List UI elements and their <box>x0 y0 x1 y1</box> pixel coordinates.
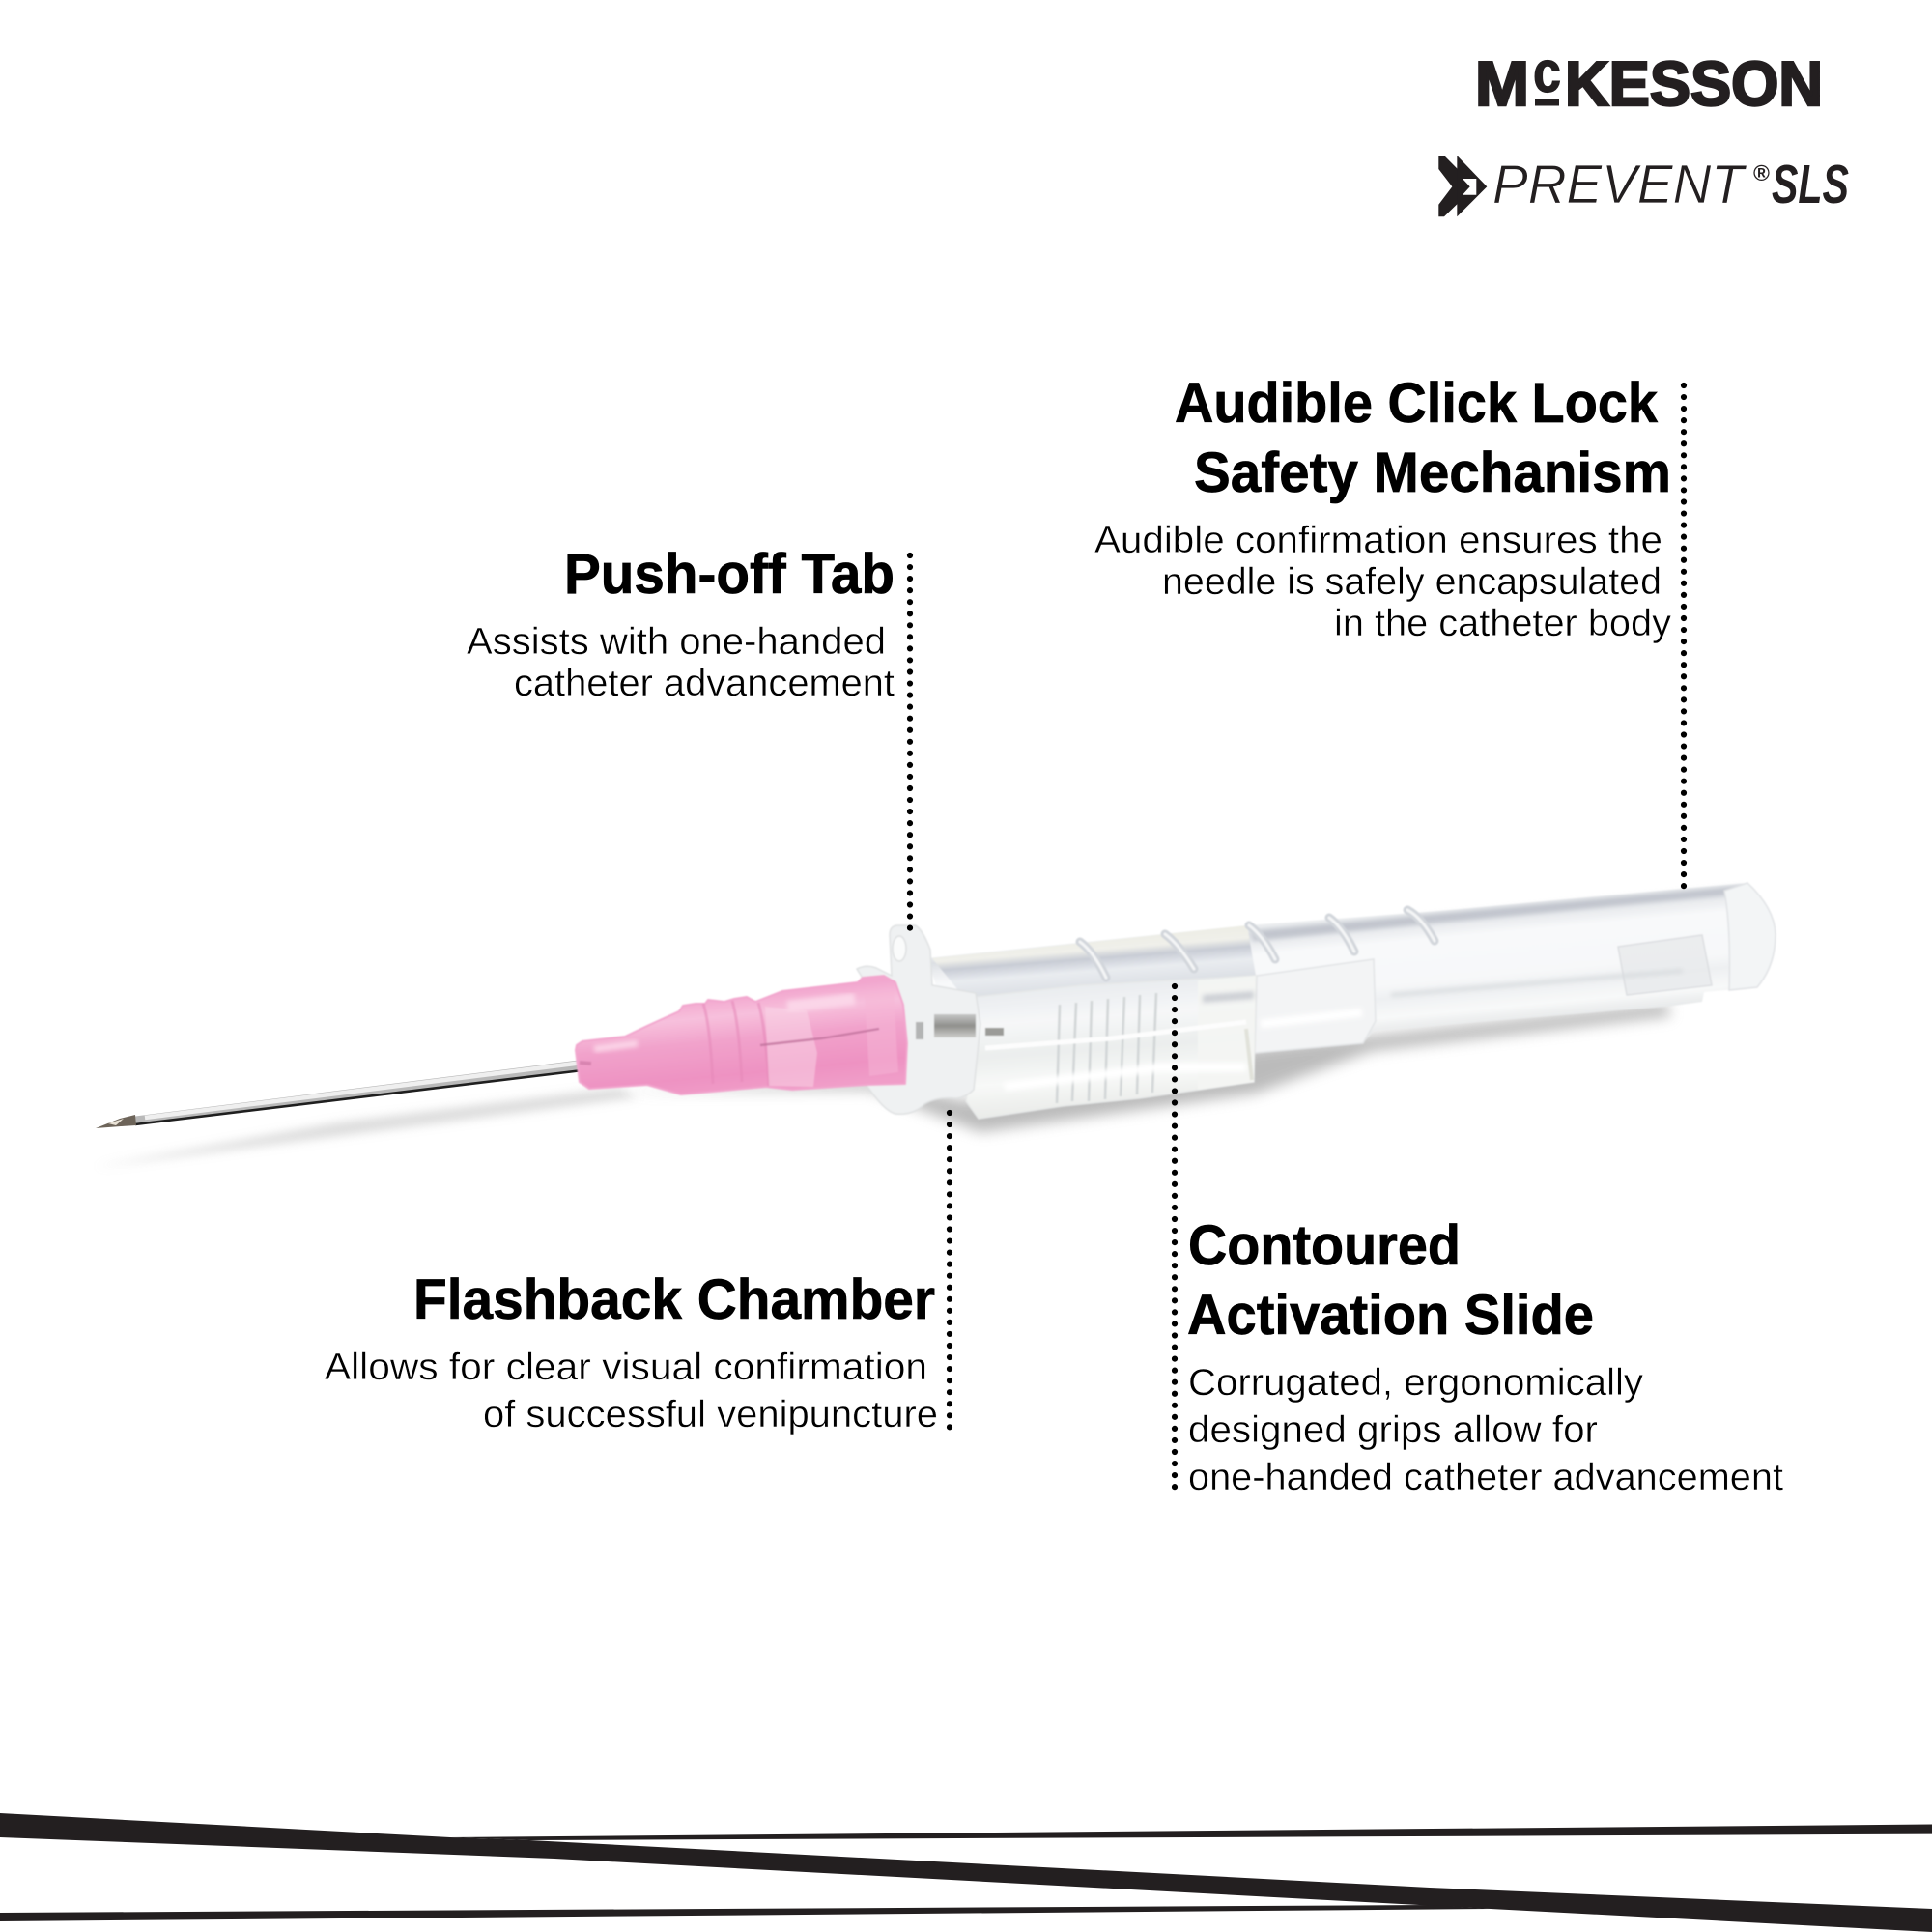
heading: Contoured <box>1188 1214 1461 1277</box>
description: of successful venipuncture <box>483 1394 938 1435</box>
McKesson logo: c <box>1533 40 1561 104</box>
catheter body shadow <box>618 1003 1671 1132</box>
heading: Flashback Chamber <box>413 1268 935 1331</box>
sleeve section <box>1255 959 1376 1053</box>
description <box>1188 1362 1783 1498</box>
translucent band <box>765 1007 817 1087</box>
description: Audible confirmation ensures the <box>1094 520 1662 561</box>
push-off tab hole <box>893 936 906 961</box>
callout: Contoured Activation Slide <box>1175 986 1783 1498</box>
pink hub <box>576 976 907 1094</box>
needle <box>96 1060 582 1128</box>
description: Allows for clear visual confirmation <box>325 1347 927 1388</box>
Prevent SLS logo <box>1438 154 1849 216</box>
heading <box>1187 1214 1594 1347</box>
heading: Activation Slide <box>1187 1284 1594 1347</box>
dotted leader <box>907 555 913 928</box>
clear outer tube <box>927 883 1776 1082</box>
description: one-handed catheter advancement <box>1188 1457 1783 1498</box>
clear plastic body <box>576 883 1776 1119</box>
tube inner clip <box>1618 935 1712 995</box>
callout: Push-off Tab <box>467 543 910 928</box>
Prevent SLS logo: SLS <box>1772 154 1849 215</box>
hub highlights <box>594 1043 638 1049</box>
description: in the catheter body <box>1334 603 1671 644</box>
description <box>325 1347 938 1435</box>
inner needle metal <box>934 1014 976 1037</box>
IV catheter product illustration <box>95 883 1776 1167</box>
tube end cap <box>1724 883 1776 990</box>
callout: Flashback Chamber <box>325 1113 950 1435</box>
dotted leader <box>1681 385 1687 888</box>
description <box>467 621 895 704</box>
contoured activation slide <box>966 976 1256 1119</box>
Prevent SLS logo: PREVENT <box>1492 154 1747 215</box>
McKesson logo <box>1475 40 1823 119</box>
description <box>1094 520 1671 644</box>
hub flange and push-off tab <box>857 925 1004 1114</box>
dotted leader <box>947 1113 952 1428</box>
corrugated grip lines <box>1057 993 1156 1103</box>
icon: double chevron <box>1438 156 1487 216</box>
McKesson logo: M <box>1475 48 1529 119</box>
heading: Push-off Tab <box>564 543 895 606</box>
heading: Audible Click Lock <box>1175 372 1659 435</box>
Prevent SLS logo: ® <box>1753 160 1770 185</box>
dotted leader <box>1172 986 1178 1489</box>
needle shadow <box>95 1088 638 1167</box>
description: Corrugated, ergonomically <box>1188 1362 1644 1404</box>
description: designed grips allow for <box>1188 1409 1598 1451</box>
description: catheter advancement <box>514 663 895 704</box>
heading <box>1175 372 1671 504</box>
bottom crossing bands <box>0 1813 1932 1932</box>
flashback slit <box>760 1029 879 1045</box>
description: needle is safely encapsulated <box>1162 561 1662 603</box>
description: Assists with one-handed <box>467 621 886 663</box>
hub ribs <box>703 1001 769 1086</box>
callout: Audible Click Lock Safety Mechanism <box>1094 372 1684 888</box>
McKesson logo: KESSON <box>1565 48 1823 119</box>
heading: Safety Mechanism <box>1194 441 1671 504</box>
ridge rings <box>1080 910 1435 978</box>
